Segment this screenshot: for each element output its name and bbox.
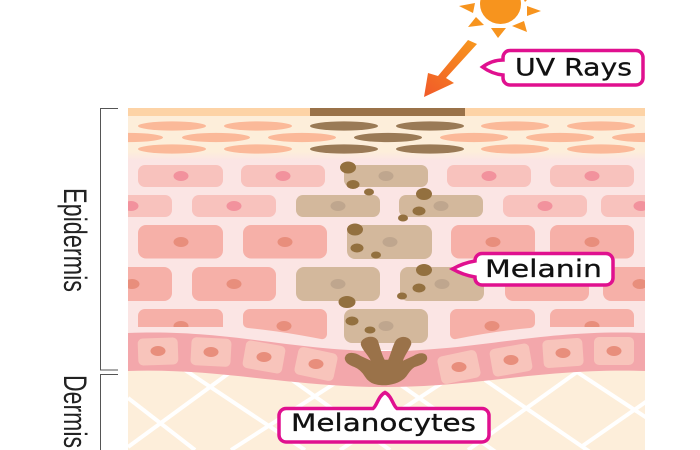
- cells: epidermis upper rows: [128, 165, 645, 217]
- bracket: dermis: [100, 374, 118, 450]
- melanin granules: [338, 162, 432, 334]
- panel: skin cross-section: [128, 108, 645, 450]
- callout: UV Rays: [482, 50, 643, 85]
- panel: stratum corneum: [128, 108, 645, 154]
- arrow: UV rays pointing to skin: [424, 40, 477, 97]
- panel: basal layer: [128, 333, 645, 387]
- panel: dermis: [128, 370, 645, 450]
- icon: sun: [459, 0, 541, 38]
- cells: melanin-filled tan cells: [296, 165, 484, 343]
- icon: melanocyte: [346, 338, 426, 384]
- panel: epidermis background: [128, 150, 645, 350]
- callout: Melanin: [452, 254, 613, 285]
- label: Epidermis: Epidermis: [57, 188, 93, 292]
- bracket: epidermis: [100, 108, 118, 370]
- cells: epidermis lower rows: [128, 225, 645, 340]
- callout: UV Rays: UV Rays: [515, 54, 632, 82]
- callout: Melanocytes: [279, 392, 489, 442]
- callout: Melanin: Melanin: [485, 255, 602, 283]
- cells: basal layer: [138, 337, 634, 385]
- callout: Melanocytes: Melanocytes: [291, 409, 476, 437]
